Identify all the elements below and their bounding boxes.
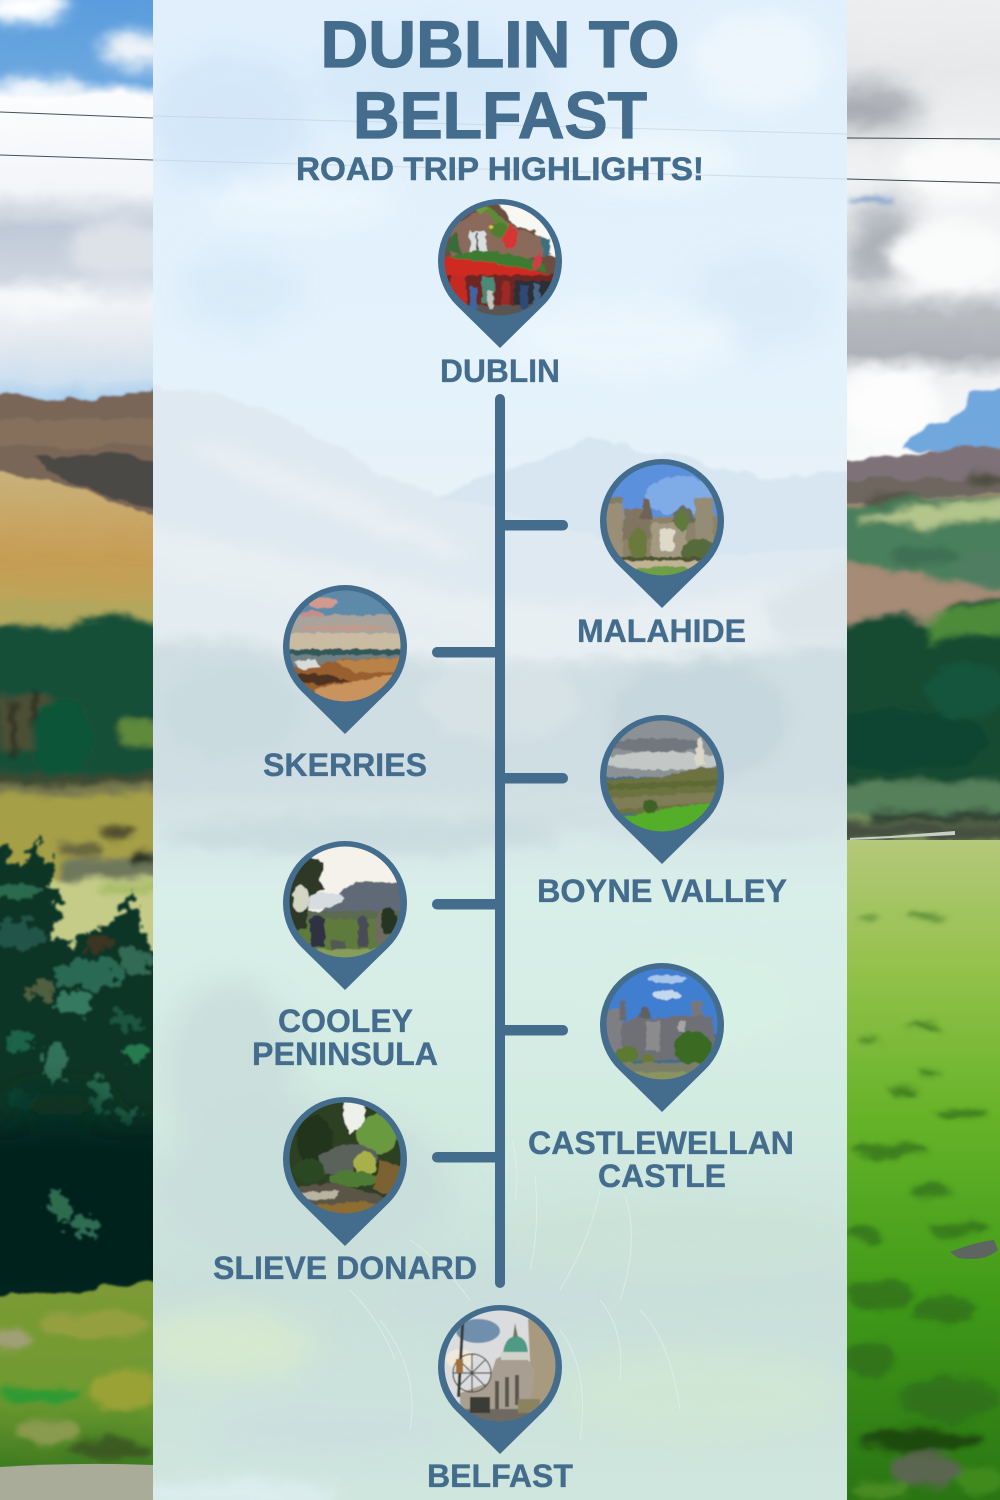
- subtitle: ROAD TRIP HIGHLIGHTS!: [296, 151, 704, 187]
- stop: Castlewellan Castle pin: [600, 963, 724, 1112]
- pine: [0, 834, 153, 1297]
- label: Boyne Valley: BOYNE VALLEY: [537, 873, 787, 909]
- stop: Belfast pin: [438, 1305, 562, 1454]
- label: Cooley Peninsula: COOLEY: [278, 1003, 413, 1039]
- stop: Cooley Peninsula pin: [275, 833, 415, 990]
- stop: Dublin pin: [438, 199, 562, 348]
- stop: Slieve Donard pin: [283, 1097, 407, 1246]
- label: Slieve Donard: SLIEVE DONARD: [213, 1250, 477, 1286]
- label: Castlewellan Castle: CASTLEWELLAN: [528, 1125, 794, 1161]
- panel: translucent timeline backdrop: [153, 0, 847, 1500]
- label: Castlewellan Castle: [528, 1125, 794, 1194]
- stop: Boyne Valley pin: [600, 715, 724, 864]
- label: Castlewellan Castle: CASTLE: [598, 1158, 726, 1194]
- stop: Malahide pin: [600, 459, 724, 608]
- title: BELFAST: [353, 78, 647, 152]
- label: Cooley Peninsula: PENINSULA: [252, 1036, 438, 1072]
- title: [320, 7, 680, 152]
- title: DUBLIN TO: [320, 7, 680, 81]
- label: Cooley Peninsula: [252, 1003, 438, 1072]
- label: Skerries: SKERRIES: [263, 747, 427, 783]
- label: Dublin: DUBLIN: [440, 353, 560, 389]
- timeline spine and branches: [432, 394, 568, 1288]
- background: left photo strip: [0, 0, 153, 1500]
- background: right photo strip: [847, 0, 1000, 1500]
- label: Malahide: MALAHIDE: [577, 613, 746, 649]
- stop: Skerries pin: [283, 585, 407, 734]
- label: Belfast: BELFAST: [427, 1458, 573, 1494]
